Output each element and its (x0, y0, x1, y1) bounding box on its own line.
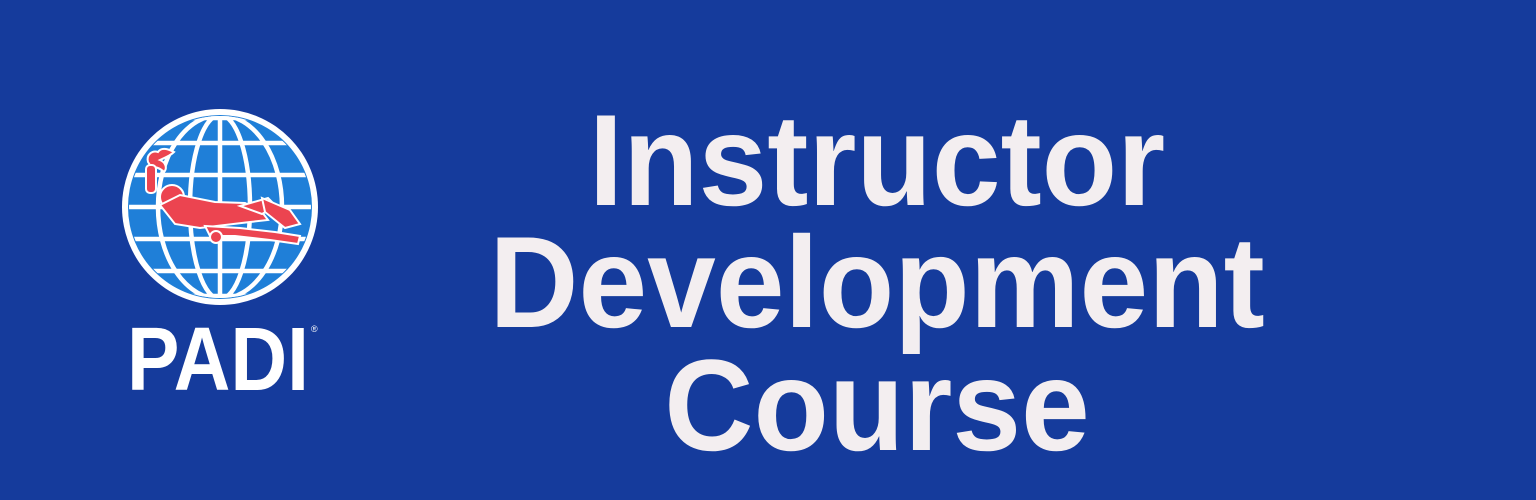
title line 1: Instructor (589, 87, 1165, 233)
title line 2: Development (489, 209, 1265, 355)
logo text: PADI: ® (311, 324, 318, 334)
icon: diver (146, 149, 300, 244)
logo: PADI (122, 109, 318, 410)
logo text: PADI: PADI (127, 310, 309, 410)
title line 3: Course (664, 332, 1090, 478)
icon: globe (122, 109, 318, 305)
